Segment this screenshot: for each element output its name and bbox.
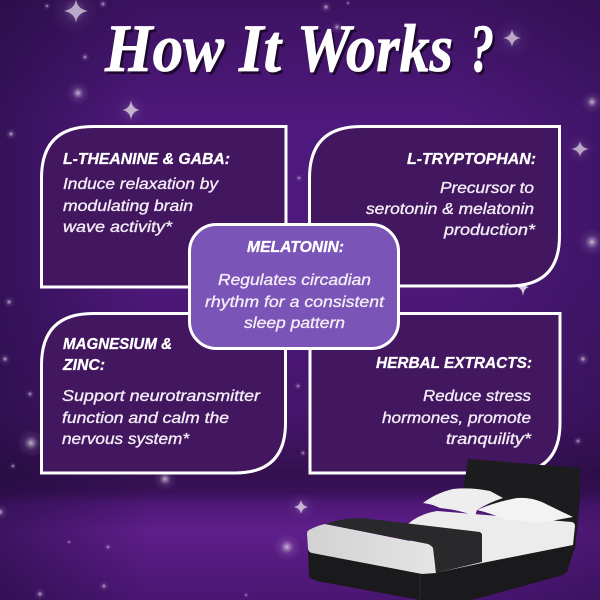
heading: Melatonin: MELATONIN:	[247, 239, 344, 256]
title: How	[104, 10, 225, 86]
text: Magnesium and Zinc description: function and calm the	[62, 410, 229, 427]
text: L-Theanine and GABA description	[63, 176, 219, 236]
text: Herbal Extracts description: hormones, promote	[382, 410, 531, 427]
black throw	[325, 518, 482, 573]
heading: Magnesium and Zinc	[62, 336, 172, 374]
title: How	[107, 13, 227, 89]
title: It	[241, 13, 285, 89]
text: L-Theanine and GABA description: wave activity*	[63, 219, 173, 236]
text: Magnesium and Zinc description: Support neurotransmitter	[62, 388, 261, 405]
pillows	[423, 488, 503, 516]
text: L-Tryptophan description: Precursor to	[440, 180, 534, 197]
bed base	[308, 540, 575, 600]
title	[104, 10, 496, 89]
text: Melatonin description: Regulates circadian	[218, 272, 371, 289]
text: L-Theanine and GABA description: modulating brain	[63, 198, 193, 215]
heading: Herbal Extracts: HERBAL EXTRACTS:	[376, 355, 532, 372]
text: Herbal Extracts description: Reduce stress	[423, 388, 531, 405]
text: L-Tryptophan description: production*	[443, 222, 536, 239]
panel: Magnesium and Zinc	[42, 314, 286, 473]
text: Herbal Extracts description: tranquility*	[446, 431, 532, 448]
heading: Magnesium and Zinc: ZINC:	[62, 357, 105, 374]
panel: L-Tryptophan	[310, 126, 560, 286]
text: L-Theanine and GABA description: Induce relaxation by	[63, 176, 219, 193]
text: Melatonin description: rhythm for a consistent	[205, 294, 385, 311]
heading: L-Tryptophan: L-TRYPTOPHAN:	[407, 151, 536, 168]
panel: Melatonin	[190, 224, 398, 348]
text: L-Tryptophan description	[366, 180, 536, 239]
front mattress	[307, 524, 436, 574]
title: ?	[472, 13, 496, 89]
panel: L-Theanine and GABA	[42, 126, 286, 287]
title: It	[238, 10, 283, 86]
text: Herbal Extracts description	[382, 388, 532, 448]
text: Melatonin description	[205, 272, 385, 332]
text: Melatonin description: sleep pattern	[244, 315, 345, 332]
title: ?	[470, 10, 494, 86]
headboard	[463, 459, 580, 550]
text: Magnesium and Zinc description	[62, 388, 261, 448]
title: Works	[297, 10, 453, 86]
panel: Herbal Extracts	[310, 314, 560, 473]
text: L-Tryptophan description: serotonin & melatonin	[366, 201, 534, 218]
title: Works	[300, 13, 456, 89]
text: Magnesium and Zinc description: nervous system*	[62, 431, 190, 448]
heading: L-Theanine and GABA: L-THEANINE & GABA:	[63, 151, 230, 168]
back mattress	[400, 511, 575, 572]
illustration: bed	[307, 459, 580, 600]
heading: Magnesium and Zinc: MAGNESIUM &	[63, 336, 172, 353]
